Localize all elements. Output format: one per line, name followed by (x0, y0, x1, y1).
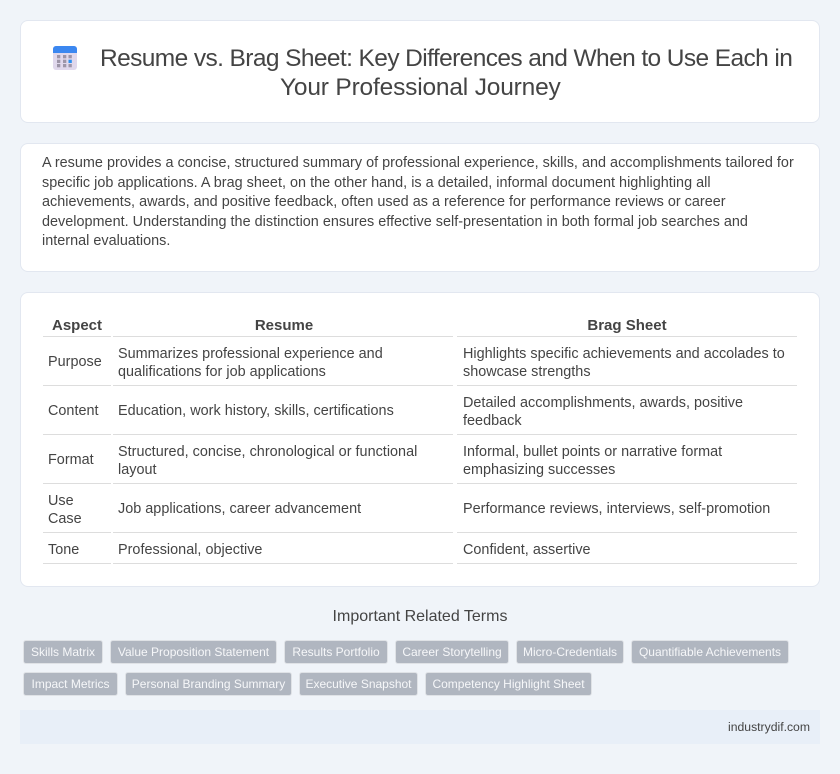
table header: Aspect (52, 317, 102, 334)
tag: Quantifiable Achievements (639, 645, 781, 659)
tag (23, 640, 103, 664)
tags: related terms (23, 640, 789, 696)
text block: summary: internal evaluations. (42, 233, 170, 249)
row: Format (48, 444, 722, 478)
heading: Your Professional Journey (280, 74, 561, 101)
row: Format: layout (118, 462, 157, 478)
row: Tone: Confident, assertive (463, 542, 591, 558)
row: Format: Structured, concise, chronological or functional (118, 444, 417, 460)
row: Use Case: Job applications, career advancement (118, 501, 361, 517)
row: Purpose (48, 346, 785, 380)
tag: Micro-Credentials (523, 645, 617, 659)
tag (395, 640, 509, 664)
text block: summary: A resume provides a concise, structured summary of professional experience, skills, and accomplishments tailored for (42, 155, 794, 171)
table header (52, 317, 667, 334)
row: Tone: Tone (48, 542, 79, 558)
row: Format: emphasizing successes (463, 462, 615, 478)
row: Use Case: Use (48, 493, 74, 509)
tag (631, 640, 789, 664)
text block: summary (42, 155, 794, 249)
tag: Impact Metrics (31, 677, 110, 691)
row: Format: Format (48, 452, 94, 468)
text block: summary: development. Understanding the distinction ensures effective self-presentation in both formal job searches and (42, 214, 748, 230)
row: Content: Education, work history, skills, certifications (118, 403, 394, 419)
heading: related terms: Important Related Terms (333, 608, 507, 625)
row: Use Case (48, 493, 770, 527)
tag (23, 672, 118, 696)
row: Purpose: Summarizes professional experience and (118, 346, 383, 362)
row: Use Case: Case (48, 511, 82, 527)
tag (110, 640, 277, 664)
footer bar (20, 710, 820, 744)
table header: Resume (255, 317, 313, 334)
row: Purpose: qualifications for job applications (118, 364, 326, 380)
table header: Brag Sheet (587, 317, 667, 334)
row: Content: Detailed accomplishments, awards, positive (463, 395, 743, 411)
tag (125, 672, 292, 696)
tag: Value Proposition Statement (118, 645, 269, 659)
row: Purpose: Highlights specific achievements and accolades to (463, 346, 785, 362)
row: Use Case: Performance reviews, interviews, self-promotion (463, 501, 770, 517)
row: Content (48, 395, 743, 429)
tag (425, 672, 592, 696)
row: Format: Informal, bullet points or narrative format (463, 444, 722, 460)
panel: summary paragraph (20, 143, 820, 272)
panel: title (20, 20, 820, 123)
text block: summary: achievements, awards, and positive feedback, often used as a reference for performance reviews or career (42, 194, 726, 210)
tag: Skills Matrix (31, 645, 95, 659)
heading: Resume vs. Brag Sheet: Key Differences and When to Use Each in (100, 45, 792, 72)
tag (516, 640, 624, 664)
row: Tone (48, 542, 591, 558)
panel: comparison table (20, 292, 820, 587)
row: Content: Content (48, 403, 99, 419)
row: Content: feedback (463, 413, 522, 429)
tag: Personal Branding Summary (132, 677, 285, 691)
icon: calendar (53, 46, 77, 70)
footer text: industrydif.com (728, 720, 810, 734)
tag: Results Portfolio (292, 645, 380, 659)
tag: Executive Snapshot (305, 677, 412, 691)
tag: Career Storytelling (402, 645, 502, 659)
tag: Competency Highlight Sheet (432, 677, 585, 691)
row: Purpose: showcase strengths (463, 364, 591, 380)
tag (284, 640, 388, 664)
row: Purpose: Purpose (48, 354, 102, 370)
heading (100, 45, 792, 101)
tag (299, 672, 418, 696)
row: Tone: Professional, objective (118, 542, 262, 558)
text block: summary: specific job applications. A brag sheet, on the other hand, is a detailed, informal document highlighting all (42, 174, 711, 190)
